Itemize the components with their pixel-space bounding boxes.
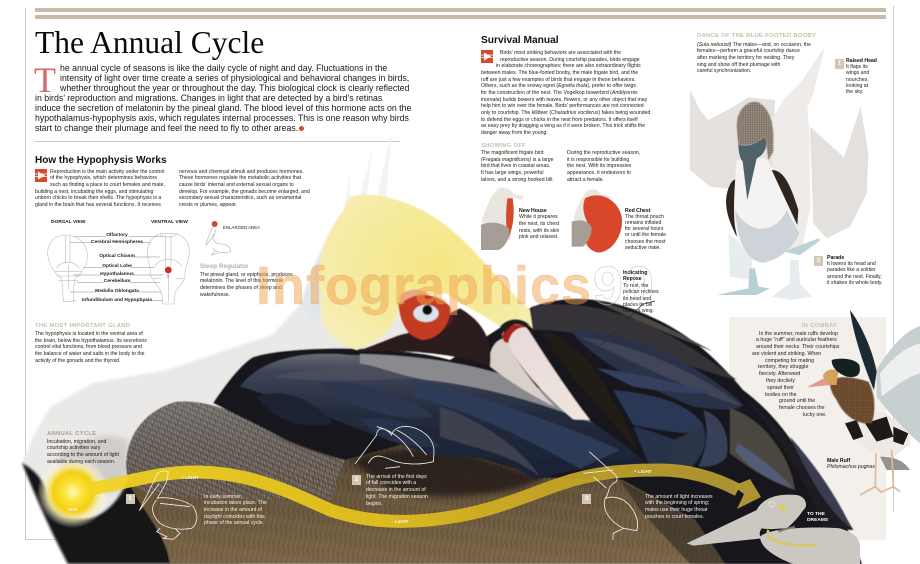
text block: introduction: hypothalamus-hypophysis axis, which regulates internal processes. This is one reason why birds (35, 113, 409, 123)
text block: most important gland: control vital functions, from blood pressure and (35, 344, 142, 350)
text block: in combat: territory, they struggle (758, 364, 808, 370)
text block: booby dance: DANCE OF THE BLUE-FOOTED BOOBY (697, 33, 816, 39)
text block: booby dance: (Sula nebouxii) The males—and, on occasion, the (697, 42, 811, 48)
text block: hypophysis column 1: building a nest, incubating the eggs, and stimulating (35, 189, 153, 195)
label: enlarged area: ENLARGED AREA (223, 225, 260, 230)
text block: indicating repose: To rest, the (623, 283, 649, 289)
text block: step 2 (366, 474, 428, 507)
text block: introduction: in birds’ reproduction and migrations. Changes in light that are detected by a bird’s retinas (35, 93, 382, 103)
labels: brain parts: Optical Chiasm (99, 254, 135, 259)
heading: how the hypophysis works: How the Hypophysis Works (35, 155, 167, 166)
text block: booby dance: females—perform a graceful courtship dance (697, 48, 800, 54)
text block: survival manual: for the construction of the nest. The Vogelkop bowerbird (Amblyornis (481, 90, 637, 96)
text block: indicating repose (623, 270, 659, 314)
step 1 marker: 1 (128, 496, 132, 502)
text block: red chest: Red Chest (625, 208, 650, 214)
text block: step 3: males use their huge throat (645, 507, 707, 513)
text block: step 1: increase in the amount of (204, 507, 262, 513)
text block: annual cycle: according to the amount of light (47, 452, 119, 458)
text block: most important gland (35, 323, 147, 364)
text block: hypophysis column 1: of the hypophysis, which determines behaviors (50, 175, 157, 181)
callout: raised head: nourches, (846, 77, 869, 83)
text block: step 1 (204, 494, 267, 526)
text block: step 1: incubation takes place. The (204, 500, 267, 506)
label: sun: SUN (68, 507, 77, 512)
text block: showing off column 2: appearance, it endeavors to (567, 170, 631, 176)
text block: hypophysis column 2: nervous and chemical stimuli and produces hormones. (179, 168, 304, 174)
text block: indicating repose: Repose (623, 276, 642, 282)
text block: hypophysis column 2 (179, 168, 310, 208)
label: to the dreams (807, 512, 828, 523)
callout: parade: Parade (827, 255, 844, 261)
text block: step 3: The amount of light increases (645, 494, 713, 500)
callout: raised head: wings and (846, 70, 869, 76)
text block: red chest: seductive male. (625, 245, 661, 251)
text block: new house: pink and relaxed. (519, 234, 558, 240)
text block: in combat: around their necks. Their courtships (756, 344, 839, 350)
text block: introduction (34, 60, 411, 133)
text block: step 1: daylight coincides with this (204, 514, 265, 520)
text block: hypophysis column 1: unborn chicks to break their shells. The hypophysis is a (35, 195, 161, 201)
head and bill (319, 195, 590, 420)
text block: sleep regulator: The pineal gland, or epiphysis, produces (200, 272, 293, 278)
labels: brain views (51, 220, 188, 225)
text block: showing off column 2: the nest. With its impressive (567, 163, 631, 169)
text block: hypophysis column 2: secondary sexual characteristics, such as ornamental (179, 195, 301, 201)
labels: brain parts: Hypothalamus (100, 272, 134, 277)
step 3 marker (582, 494, 591, 504)
text block: step 3 (645, 494, 713, 520)
step 2 marker: 2 (355, 477, 358, 483)
text block: survival manual: only to courtship. The killdeer (Charadrius vociferus) fakes being wounded (481, 110, 650, 116)
text block: in combat: In the summer, male ruffs develop (759, 330, 838, 336)
text block: in combat: lucky one. (803, 412, 827, 418)
text block: introduction: start to change their plumage and feel the need to fly to other areas. (35, 123, 298, 133)
text block: showing off column 1: talons, and a strong hooked bill. (481, 177, 554, 183)
labels: brain views: VENTRAL VIEW (151, 220, 188, 225)
wing feathers right (360, 300, 853, 530)
label: to the dreams: DREAMS (807, 518, 828, 523)
text block: survival manual: inornata) builds bowers with leaves, flowers, or any other object that may (481, 97, 647, 103)
icon: section arrow left (35, 169, 47, 182)
chart: brain diagrams (48, 233, 189, 304)
text block: survival manual: ruff are just a few examples of birds that engage in these behaviors. (481, 77, 636, 83)
callout: raised head: the sky. (846, 89, 863, 95)
labels: brain parts (82, 232, 152, 303)
icon: male ruff (807, 310, 920, 495)
text block: in combat: are violent and striking. When (752, 351, 821, 357)
label: to the dreams: TO THE (807, 512, 825, 517)
icon: pelican outline summer (139, 471, 197, 539)
text block: annual cycle: Incubation, migration, and (47, 438, 106, 444)
text block: showing off column 1: The magnificent frigate bird (481, 150, 543, 156)
text block: red chest (625, 208, 666, 251)
text block: hypophysis column 1: Reproduction is the main activity under the control (50, 168, 164, 174)
icon: booby ghost pose (690, 47, 868, 300)
text block: survival manual: between males. The blue-footed booby, the male frigate bird, and the (481, 70, 638, 76)
text block: booby dance: careful synchronization. (697, 68, 751, 74)
text block: survival manual: help him to win over the female. Birds’ performances are not connected (481, 103, 644, 109)
text block: step 3: pouches to court females. (645, 514, 704, 520)
text block: showing off column 1: SHOWING OFF (481, 143, 526, 149)
step 3 marker: 3 (585, 496, 588, 502)
labels: brain parts: Cerebellum (104, 279, 130, 284)
text block: showing off column 1 (481, 143, 554, 183)
text block: indicating repose: places its bill (623, 302, 652, 308)
icon: pelican outline migration (355, 426, 434, 468)
large wing over body (240, 354, 647, 479)
step 1 marker (126, 494, 134, 504)
caption: male ruff (827, 458, 875, 470)
label: light 2: - LIGHT (392, 518, 409, 524)
text block: booby dance (697, 33, 816, 74)
text block: in combat: fiercely. Afterward (759, 371, 800, 377)
text block: new house: the nest, its chest (519, 221, 559, 227)
caption: male ruff: Male Ruff (827, 458, 850, 464)
text block: step 3: with the beginning of spring; (645, 500, 709, 506)
text block: survival manual: in elaborate choreographies; there are also extraordinary flights (496, 63, 641, 69)
text block: showing off column 1: It has large wings, powerful (481, 170, 543, 176)
icon: enlarged area pelican (206, 221, 231, 255)
labels: brain views: DORSAL VIEW (51, 220, 85, 225)
watermark: 90 (593, 256, 655, 316)
text block: introduction: whether throughout the year or throughout the day. This biological clock is clearly reflected (60, 83, 409, 93)
text block: indicating repose: Indicating (623, 270, 647, 276)
text block: red chest: The throat pouch (625, 214, 664, 220)
text block: hypophysis column 2: cause birds’ internal and external sexual organs to (179, 182, 294, 188)
label: light 3: + LIGHT (634, 468, 652, 474)
text block: in combat: competing for mating (765, 358, 814, 364)
text block: new house: New House (519, 208, 547, 214)
text block: in combat: a huge “ruff” and auricular feathers (756, 337, 837, 343)
icon: leader line to pelican (583, 301, 655, 362)
icon: pelican outline courtship (583, 452, 638, 540)
text block: sleep regulator: wakefulness. (200, 292, 230, 298)
labels: brain parts: Olfactory (106, 233, 128, 238)
text block: sleep regulator: melatonin. The level of this hormone (200, 278, 283, 284)
labels: brain parts: Cerebral Hemispheres (91, 240, 143, 244)
text block: annual cycle: courtship activities vary (47, 445, 100, 451)
icon: blue-footed booby (717, 102, 821, 295)
text block: hypophysis column 2: These hormones regulate the metabolic activities that (179, 175, 301, 181)
text block: most important gland: activity of the gonads and the thyroid. (35, 358, 120, 364)
text block: in combat: sprawl their (767, 385, 794, 391)
labels: brain parts: Infundibulum and Hypophysis (82, 298, 152, 303)
text block: step 2: light. The migration season (366, 494, 428, 500)
text block: red chest: or until the female (625, 232, 666, 238)
text block: red chest: chooses the most (625, 239, 665, 245)
icon: section arrow right (481, 50, 493, 63)
text block: sleep regulator (200, 263, 293, 298)
label: light 1: + LIGHT (181, 474, 199, 480)
icon: grey pelican silhouette (687, 495, 860, 564)
icon: frigate bird red chest (572, 189, 622, 253)
callout: raised head: 1 (838, 61, 841, 67)
icon: frigate bird new house (481, 188, 523, 250)
text block: annual cycle: ANNUAL CYCLE (47, 431, 96, 437)
text block: survival manual (481, 50, 650, 136)
black left body edge (22, 463, 240, 564)
callout: parade: It lowers its head and (827, 261, 876, 267)
text block: in combat: IN COMBAT (802, 323, 837, 329)
text block: hypophysis column 1 (35, 168, 165, 208)
callout: parade: it shakes its whole body. (827, 280, 883, 286)
text block: new house: While it prepares (519, 214, 558, 220)
text block: showing off column 2: During the reproductive season, (567, 150, 640, 156)
text block: red chest: remains inflated (625, 220, 661, 226)
text block: hypophysis column 1: such as finding a place to court females and mate, (50, 182, 165, 188)
text block: in combat: ground until the (779, 398, 815, 404)
text block: indicating repose: pelican reclines (623, 289, 659, 295)
text block: new house: rests, with its skin (519, 228, 559, 234)
text block: red chest: for several hours (625, 226, 663, 232)
text block: in combat: bodies on the (765, 392, 797, 398)
text block: introduction: induce the secretion of melatonin by the pineal gland. The blood level of this hormone acts on the (35, 103, 411, 113)
text block: hypophysis column 2: crests or plumes, appear. (179, 202, 237, 208)
text block: hypophysis column 2: develop. For example, the gonads become enlarged, and (179, 189, 310, 195)
text block: booby dance: sing and show off their plumage with (697, 62, 780, 68)
text block: indicating repose: under a wing. (623, 308, 654, 314)
text block: sleep regulator: determines the phases of sleep and (200, 285, 282, 291)
text block: showing off column 2 (567, 150, 640, 183)
text block: survival manual: to defend the eggs or chicks in the nest from predators. It offers itself (481, 117, 638, 123)
text block: most important gland: the brain, below the hypothalamus. Its secretions (35, 338, 147, 344)
text block: hypophysis column 1: gland in the brain that has several functions. It receives (35, 202, 161, 208)
text block: new house (519, 208, 560, 240)
caption: male ruff: Philomachus pugnax (827, 464, 875, 470)
callout: raised head: Raised Head (846, 58, 877, 64)
text block: step 2: of fall coincides with a (366, 480, 416, 486)
text block: showing off column 2: attract a female. (567, 177, 604, 183)
callout: raised head: looking at (846, 83, 868, 89)
text block: most important gland: the balance of water and salts in the body to the (35, 351, 144, 357)
text block: most important gland: THE MOST IMPORTANT GLAND (35, 323, 130, 329)
text block: annual cycle: available during each season. (47, 459, 115, 465)
watermark: Infographics (256, 256, 592, 316)
text block: most important gland: The hypophysis is located in the ventral area of (35, 331, 143, 337)
callout: parade: parades like a soldier (827, 267, 876, 273)
main dark body (213, 299, 862, 564)
text block: step 2: decrease in the amount of (366, 487, 426, 493)
step 2 marker (352, 475, 361, 485)
text block: survival manual: reproductive season. During courtship parades, birds engage (500, 57, 640, 63)
text block: survival manual: danger away from the young. (481, 130, 548, 136)
text block: step 1: phase of the annual cycle. (204, 520, 264, 526)
photo: brown pelican (22, 130, 862, 564)
text block: showing off column 1: (Fregata magnificens) is a large (481, 157, 554, 163)
callout: raised head: It flaps its (846, 64, 868, 70)
text block: showing off column 2: it is responsible for building (567, 157, 629, 163)
panel: in combat background (729, 317, 886, 540)
text block: annual cycle (47, 431, 119, 465)
callout: parade: 2 (817, 258, 820, 264)
labels: brain parts: Optical Lobe (102, 264, 132, 269)
text block: survival manual: Others, such as the snowy egret (Egretta thula), prefer to offer twigs (481, 83, 636, 89)
text block: step 2: begins. (366, 501, 383, 507)
white neck (22, 205, 420, 564)
text block: survival manual: Birds’ most striking behaviors are associated with the (500, 50, 621, 56)
callout: parade (814, 255, 883, 286)
text block: introduction: intensity of light over time create a series of physiological and behavioral changes in birds, (60, 73, 409, 83)
neck and chest base (126, 401, 725, 564)
text block: step 1: In early summer, (204, 494, 242, 500)
text block: in combat: female chooses the (779, 405, 825, 411)
text block: showing off column 1: bird that lives in coastal areas. (481, 163, 550, 169)
text block: in combat: they docilely (766, 378, 795, 384)
labels: brain parts: Medulla Oblongata (95, 289, 139, 294)
heading: survival manual: Survival Manual (481, 35, 559, 46)
text block: indicating repose: its head and (623, 296, 651, 302)
text block: survival manual: as easy prey by dragging a wing as if it were broken. This trick shifts the (481, 123, 645, 129)
text block: step 2: The arrival of the first days (366, 474, 427, 480)
text block: in combat (752, 323, 840, 418)
text block: introduction: T (34, 60, 56, 100)
callout: parade: around the nest. Finally, (827, 274, 882, 280)
title: The Annual Cycle (35, 25, 264, 60)
callout: raised head (835, 58, 877, 95)
text block: sleep regulator: Sleep Regulator (200, 263, 249, 270)
text block: booby dance: after marking the territory for nesting. They (697, 55, 794, 61)
text block: introduction: he annual cycle of seasons is like the daily cycle of night and day. Fluctuations in the (60, 63, 387, 73)
chart: annual light cycle path (37, 456, 761, 528)
